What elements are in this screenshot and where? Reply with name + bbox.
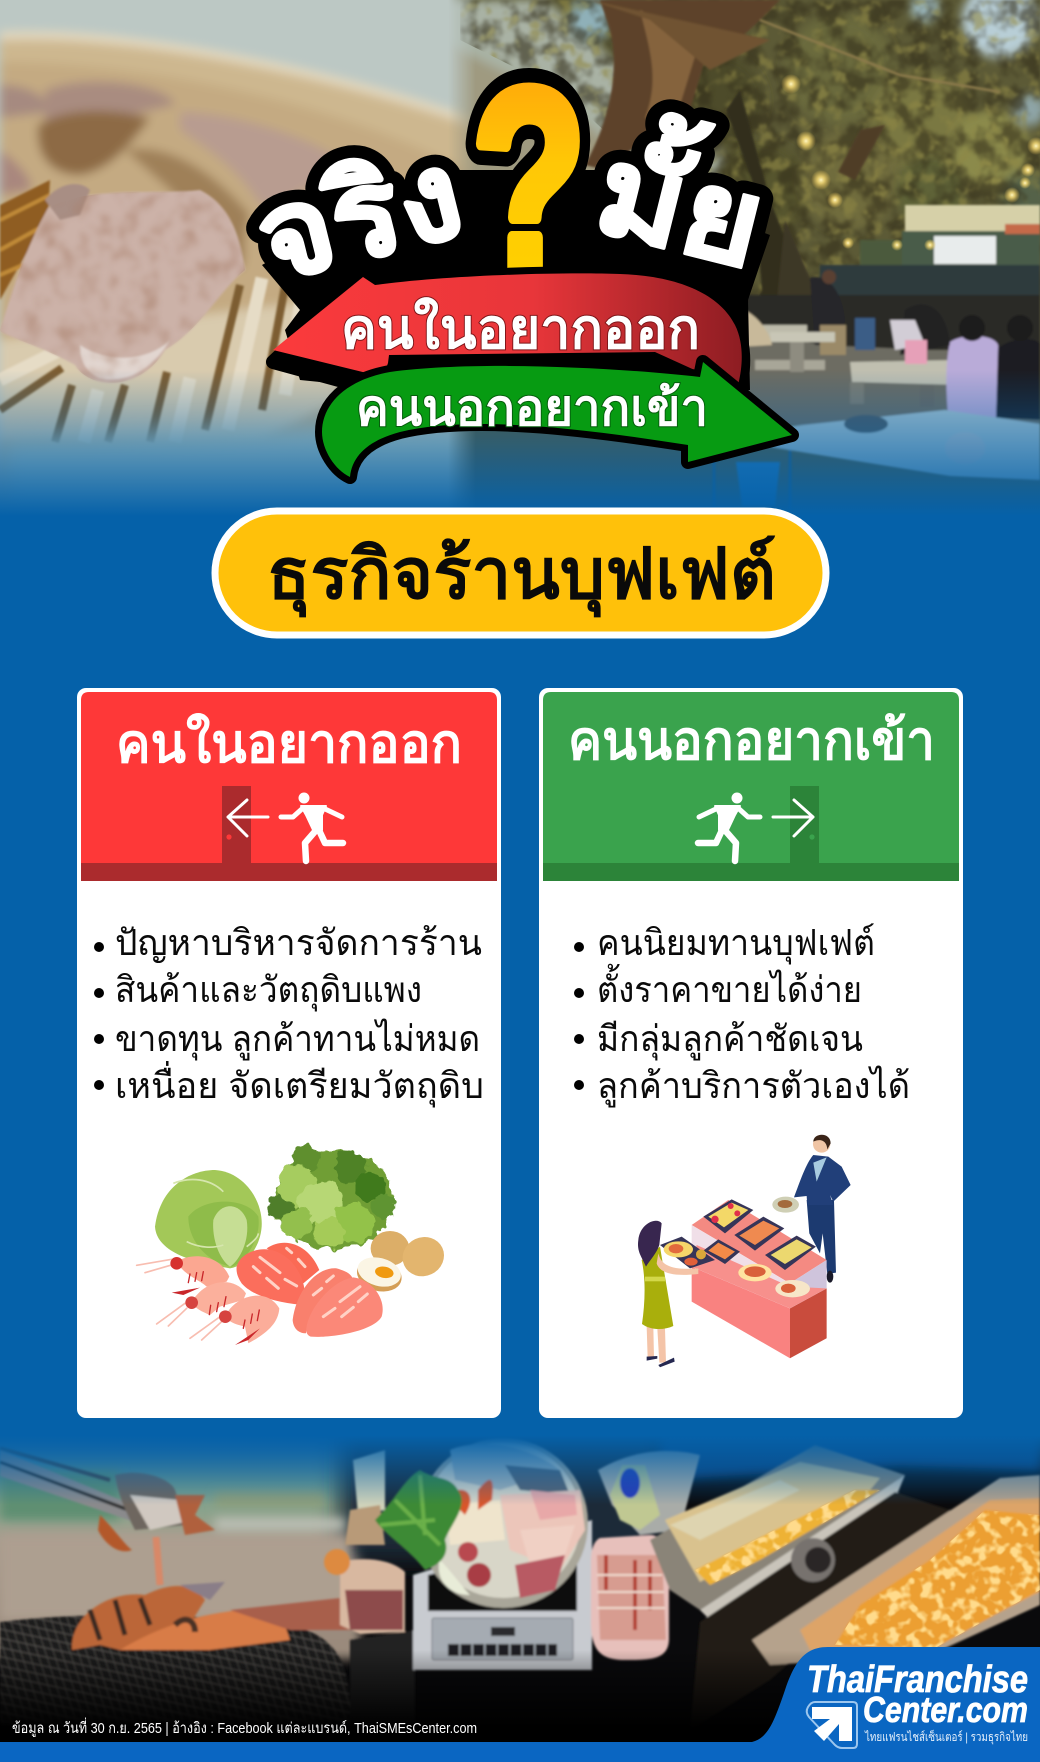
word มั้ย: มั้ย (584, 101, 782, 293)
list: reasons: ลูกค้าบริการตัวเองได้ (597, 1065, 910, 1108)
icon: person running to door on the right (698, 786, 819, 864)
icon: person running through door to the left (222, 786, 343, 864)
list: problems: ปัญหาบริหารจัดการร้าน (115, 922, 482, 963)
cabbage stalks (353, 1450, 385, 1515)
list: reasons: คนนิยมทานบุฟเฟต์ (597, 922, 875, 965)
list: problems: เหนื่อย จัดเตรียมวัตถุดิบ (115, 1061, 484, 1108)
logo panel and bottom bar (0, 1647, 1040, 1762)
word จริง: จริง (243, 126, 475, 307)
panel: คนนอกอยากเข้า (539, 688, 963, 1418)
word จริง: จริง (243, 126, 475, 307)
word มั้ย: มั้ย (584, 101, 782, 293)
logo: ThaiFranchise Center.com (807, 1659, 1028, 1748)
string lights (781, 74, 1040, 251)
garnish and fish (598, 1451, 700, 1535)
woman with tray (638, 1221, 715, 1367)
pink meat plate (591, 1535, 669, 1660)
red arrow pointing left (273, 273, 743, 396)
illustration: buffet counter with customers (638, 1135, 851, 1367)
prawns on grill (72, 1586, 205, 1650)
front chafing dish (752, 1475, 1040, 1665)
man in suit (772, 1135, 851, 1283)
green arrow label: คนนอกอยากเข้า (356, 380, 708, 436)
induction cooker (413, 1520, 592, 1670)
rear chafing dish (650, 1445, 905, 1610)
illustration: raw ingredients (137, 1146, 451, 1345)
panel header: red: คนในอยากออก (116, 712, 462, 774)
red arrow label: คนในอยากออก (341, 296, 700, 360)
tongs (0, 1450, 150, 1526)
lettuce (267, 1146, 395, 1250)
eggs (353, 1230, 451, 1296)
parsley and greens (375, 1470, 462, 1570)
logo arrow icon (807, 1702, 857, 1748)
list: problems: ขาดทุน ลูกค้าทานไม่หมด (115, 1018, 480, 1061)
photo: grilled pork pan, top left (0, 0, 480, 520)
cabbage (155, 1170, 262, 1268)
source note: ข้อมูล ณ วันที่ 30 ก.ย. 2565 | อ้างอิง : Facebook แต่ละแบรนด์, ThaiSMEsCenter.com (12, 1717, 477, 1737)
panel header: red (81, 692, 497, 881)
green arrow pointing right (322, 362, 792, 477)
panel header: green (543, 692, 959, 881)
list: problems: สินค้าและวัตถุดิบแพง (115, 969, 422, 1012)
list: reasons: มีกลุ่มลูกค้าชัดเจน (597, 1018, 863, 1061)
salmon cuts (237, 1243, 383, 1337)
shrimps (137, 1256, 279, 1345)
photo: outdoor restaurant under trees, top right (440, 0, 1040, 520)
grill (0, 1615, 350, 1725)
hot pot (418, 1438, 588, 1608)
list: reasons (574, 922, 910, 1108)
question mark: ? (472, 35, 586, 328)
meat plate (340, 1559, 405, 1634)
panel: คนในอยากออก (77, 688, 501, 1418)
black backing shape (262, 170, 770, 390)
photo strip: grilled prawns, hot pot and chafing dishes (0, 1418, 1040, 1742)
panel header: green: คนนอกอยากเข้า (568, 711, 935, 771)
heading text: ธุรกิจร้านบุฟเฟต์ (267, 535, 776, 618)
title badge: จริงมั้ย with two arrows (243, 35, 792, 477)
question mark: ? (472, 35, 586, 328)
list: reasons: ตั้งราคาขายได้ง่าย (597, 963, 862, 1010)
heading pill: ธุรกิจร้านบุฟเฟต์ (215, 511, 826, 635)
list: problems (94, 922, 484, 1108)
buffet counter (692, 1199, 827, 1358)
fade from top photos into blue (0, 370, 1040, 520)
